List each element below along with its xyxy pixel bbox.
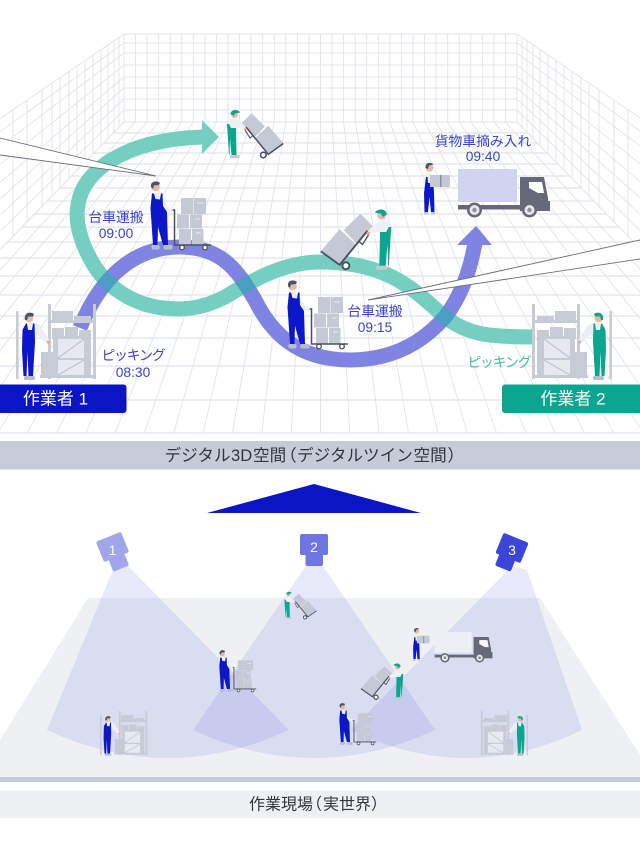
label: truck loading 09:40: 貨物車摘み入れ bbox=[435, 134, 531, 149]
caption band: real-world site bbox=[0, 790, 640, 818]
camera 3 light cone bbox=[351, 566, 582, 758]
site: worker loading truck bbox=[412, 628, 492, 663]
worker 1 with cart 09:00 bbox=[150, 181, 211, 250]
callout leader right bbox=[368, 240, 640, 300]
callout leader left bbox=[0, 138, 156, 176]
arrow: upward triangle bbox=[207, 484, 421, 513]
camera 2 bbox=[300, 534, 328, 566]
label: truck loading 09:40: 09:40 bbox=[466, 149, 501, 164]
tag: worker 1: 作業者 1 bbox=[23, 390, 88, 408]
heading band: digital space: 空間 bbox=[253, 446, 286, 465]
worker 2 picking at shelf bbox=[532, 304, 612, 380]
site: worker 2 picking bbox=[481, 711, 528, 756]
heading band: digital space: デジタルツイン bbox=[297, 445, 413, 465]
label: cart 09:15: 09:15 bbox=[358, 320, 393, 335]
heading band: digital space: 3D bbox=[231, 446, 252, 465]
site: hand truck, far bbox=[284, 592, 316, 619]
tag: worker 2 bbox=[502, 384, 640, 413]
worker 1 picking at shelf bbox=[16, 304, 96, 380]
camera 2: 2 bbox=[310, 539, 318, 555]
worker 2 with hand truck, near bbox=[321, 210, 391, 270]
label: picking 08:30: 08:30 bbox=[116, 365, 151, 380]
worker 1 with cart 09:15 bbox=[287, 280, 348, 349]
worker loading truck bbox=[423, 163, 550, 218]
heading band: digital space: デジタル bbox=[164, 445, 231, 465]
worker 2 with hand truck, far bbox=[227, 110, 283, 158]
green route arrow bbox=[77, 120, 535, 337]
heading band: digital space bbox=[0, 441, 640, 470]
site: worker with cart, left bbox=[219, 650, 256, 692]
label: picking worker 2: ピッキング bbox=[467, 355, 532, 370]
purple route arrow bbox=[73, 226, 492, 368]
tag: worker 1 bbox=[0, 384, 126, 413]
site floor bbox=[0, 598, 640, 777]
floor edge bbox=[0, 777, 640, 782]
label: picking 08:30: ピッキング bbox=[101, 348, 166, 363]
site: worker 1 picking bbox=[100, 711, 147, 756]
caption band: real-world site: 実世界 bbox=[323, 796, 371, 814]
label: cart 09:15: 台車運搬 bbox=[347, 304, 403, 319]
camera 2 light cone bbox=[193, 566, 435, 758]
camera 1: 1 bbox=[109, 542, 117, 558]
camera 3: 3 bbox=[508, 542, 516, 558]
tag: worker 2: 作業者 2 bbox=[540, 390, 606, 408]
caption band: real-world site: ） bbox=[371, 796, 387, 814]
caption band: real-world site: （ bbox=[306, 796, 322, 814]
room grid bbox=[0, 34, 640, 433]
heading band: digital space: 空間 bbox=[414, 446, 447, 465]
panel: real-world site bbox=[0, 532, 640, 782]
caption band: real-world site: 作業現場 bbox=[249, 796, 313, 814]
panel: digital 3D space bbox=[0, 34, 640, 433]
camera 1 bbox=[96, 532, 129, 572]
camera 3 bbox=[495, 533, 529, 572]
site: hand truck, near bbox=[361, 664, 403, 700]
heading band: digital space: （ bbox=[280, 446, 297, 465]
label: cart 09:00: 09:00 bbox=[99, 226, 134, 241]
label: cart 09:00: 台車運搬 bbox=[88, 210, 144, 225]
site: worker with cart, right bbox=[339, 703, 376, 745]
heading band: digital space: ） bbox=[448, 446, 464, 465]
camera 1 light cone bbox=[47, 566, 289, 758]
